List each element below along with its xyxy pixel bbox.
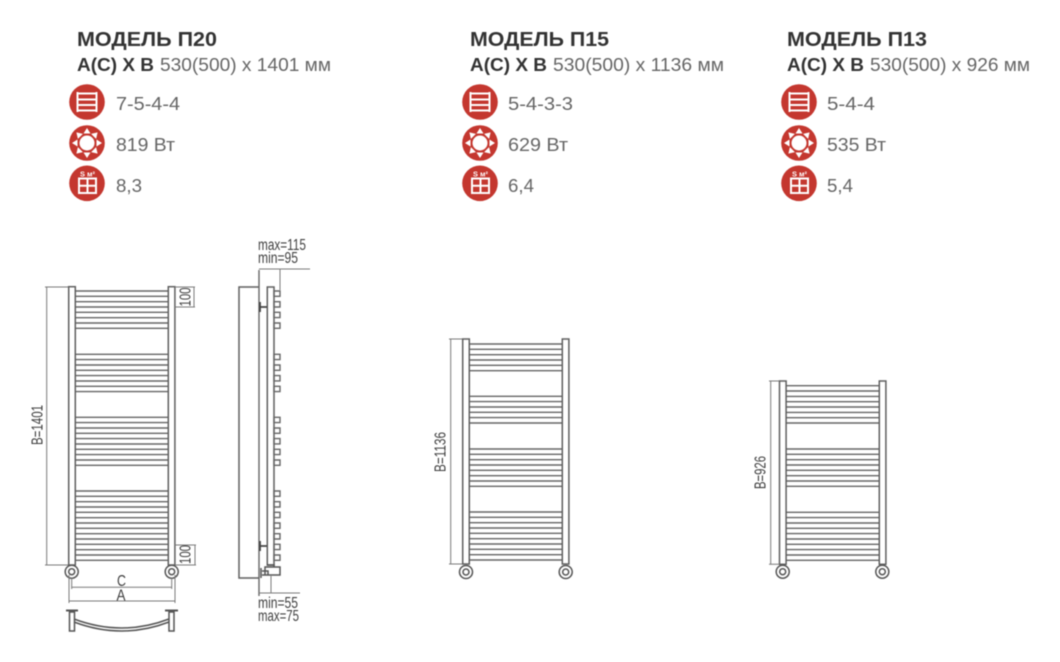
text: P20 dimensions	[77, 54, 331, 75]
towel rail bars 4-4-5-7	[75, 291, 168, 560]
dimension B=1136: B=1136	[432, 432, 450, 472]
dimension C	[72, 573, 172, 590]
dimension 100 bottom	[175, 545, 196, 565]
heading: model P15: МОДЕЛЬ П15	[470, 28, 609, 51]
drawing: P15 front view	[432, 339, 572, 578]
wall line	[258, 270, 260, 596]
text: sections value: 5-4-4	[827, 93, 875, 114]
dimension bottom	[258, 576, 300, 625]
icon: heated area	[69, 166, 105, 201]
icon: sections	[462, 84, 498, 120]
text: area value: 6,4	[508, 175, 534, 196]
valve	[261, 565, 280, 578]
drawing: P20 front view	[30, 287, 196, 631]
valves	[776, 565, 889, 578]
dimension B=926: B=926	[752, 456, 770, 489]
text: P20 dimensions: 530(500) x 1401 мм	[160, 55, 331, 75]
text: P15 dimensions: А(С) Х В	[470, 54, 547, 75]
dimension A	[69, 575, 175, 604]
dimension B=1401: B=1401	[30, 405, 46, 445]
dimension A: A	[116, 588, 126, 604]
text: P15 dimensions	[470, 54, 724, 75]
top view of curved rail	[66, 610, 178, 631]
dimension 100 top	[175, 287, 195, 307]
towel rail bars 4-4-5	[786, 386, 880, 560]
text: power value: 535 Вт	[827, 134, 887, 155]
text: sections value: 5-4-3-3	[508, 93, 573, 114]
side rails	[463, 339, 569, 564]
text: power value: 629 Вт	[508, 134, 569, 155]
side bars	[274, 291, 280, 560]
text: P13 dimensions: 530(500) x 926 мм	[870, 55, 1030, 75]
valves	[65, 565, 178, 578]
dimension B=926	[752, 381, 779, 564]
dimension B=1136	[432, 339, 462, 564]
text: area value: 8,3	[116, 175, 142, 196]
icon: heated area: S м²	[792, 170, 807, 178]
icon: power sun	[462, 125, 498, 161]
drawing: P13 front view	[752, 381, 889, 578]
text: P15 dimensions: 530(500) x 1136 мм	[553, 55, 724, 75]
dimension 100 bottom: 100	[178, 545, 194, 564]
text: P20 dimensions: А(С) Х В	[77, 54, 154, 75]
dimension B=1401	[30, 287, 68, 565]
panel: model P15 specs	[462, 28, 724, 201]
text: sections value: 7-5-4-4	[116, 93, 180, 114]
side rails	[69, 287, 175, 565]
dimension bottom: max=75	[258, 608, 299, 625]
towel rail bars 3-3-4-5	[469, 344, 562, 560]
icon: heated area: S м²	[80, 170, 95, 178]
icon: heated area	[781, 166, 817, 201]
valves	[460, 566, 572, 578]
side rails	[780, 381, 886, 564]
icon: power sun	[69, 125, 105, 161]
panel: model P13 specs	[781, 28, 1030, 201]
dimension C: C	[117, 573, 126, 590]
dimension top	[258, 237, 310, 290]
vertical rail	[267, 287, 274, 565]
wall and panel outline	[239, 287, 259, 578]
wall brackets	[260, 302, 267, 551]
heading: model P13: МОДЕЛЬ П13	[787, 28, 927, 51]
heading: model P20: МОДЕЛЬ П20	[77, 28, 217, 51]
text: area value: 5,4	[827, 175, 853, 196]
icon: heated area	[462, 166, 498, 201]
text: P13 dimensions	[787, 54, 1030, 75]
icon: sections	[781, 84, 817, 120]
drawing: P20 side view	[239, 237, 310, 625]
icon: heated area: S м²	[473, 170, 488, 178]
dimension top: min=95	[258, 250, 298, 267]
text: power value: 819 Вт	[116, 134, 176, 155]
dimension 100 top: 100	[178, 287, 194, 306]
icon: sections	[69, 84, 105, 120]
dimension top: max=115	[258, 237, 306, 254]
icon: power sun	[781, 125, 817, 161]
panel: model P20 specs	[69, 28, 331, 201]
dimension bottom: min=55	[258, 595, 298, 612]
text: P13 dimensions: А(С) Х В	[787, 54, 864, 75]
